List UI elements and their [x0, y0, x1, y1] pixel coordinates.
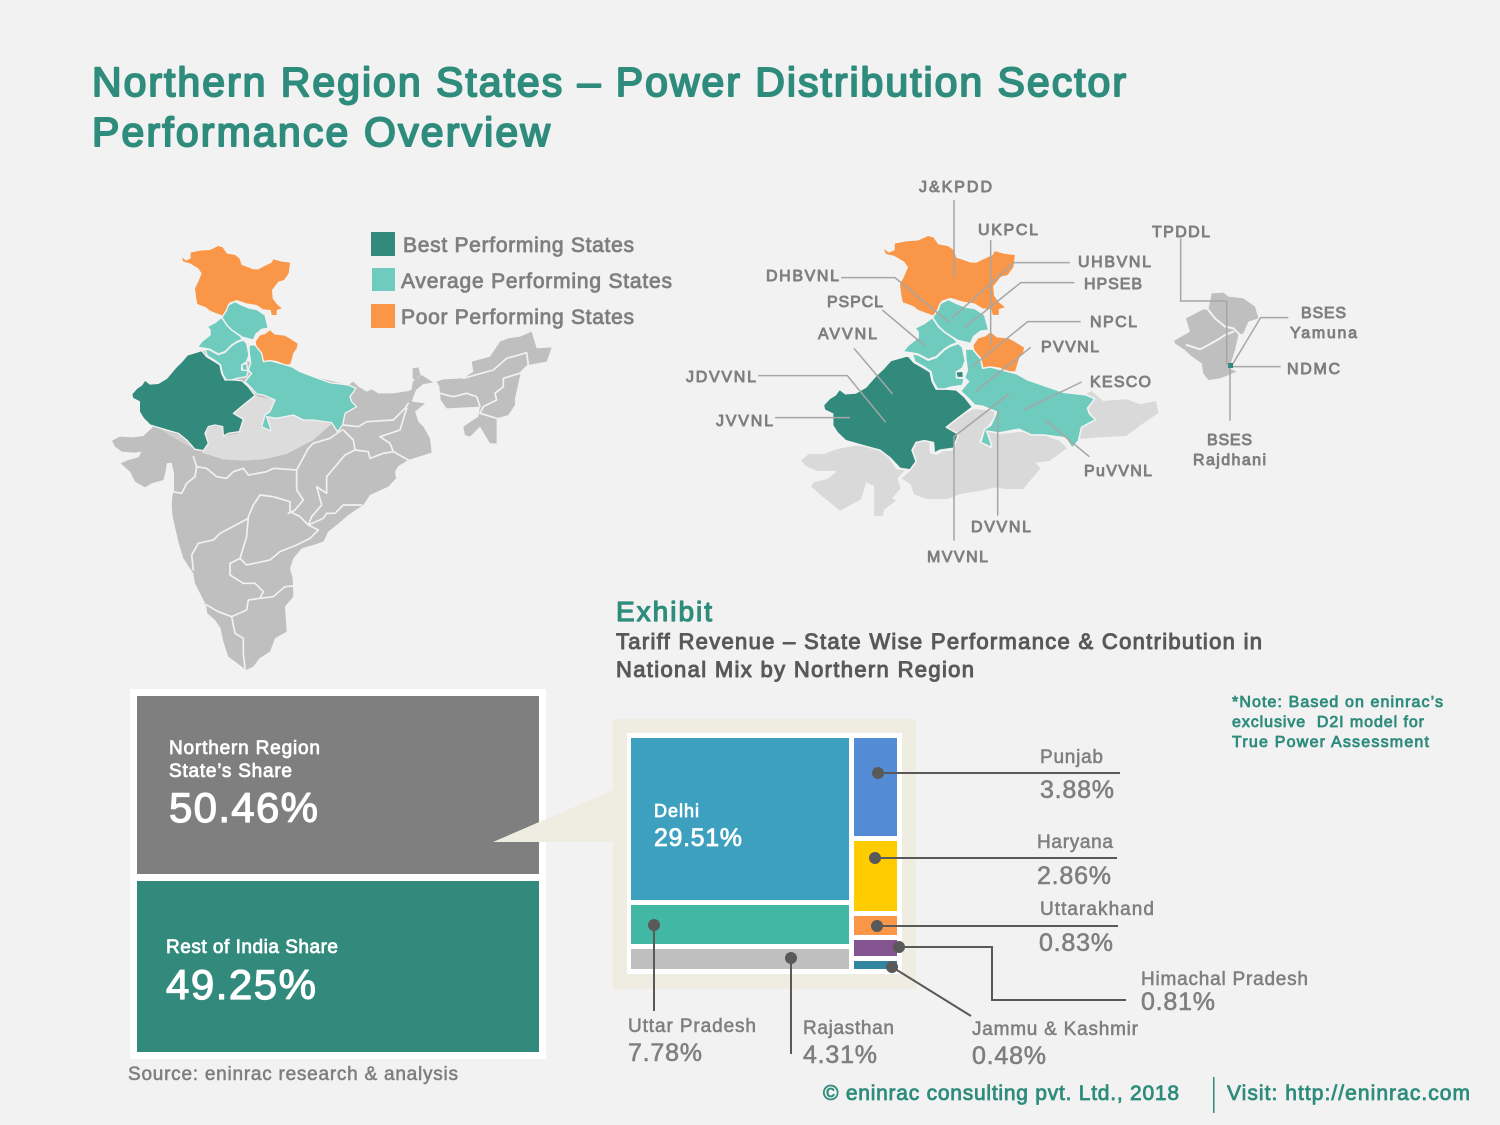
label: Rajasthan: 4.31% [803, 1041, 877, 1069]
treemap leader lines and dots [648, 767, 1126, 1054]
discom labels: NPCL [1090, 314, 1137, 331]
leader lines: northern map [758, 200, 1089, 541]
label: Haryana: Haryana [1037, 832, 1113, 853]
footer [823, 1077, 1470, 1113]
legend: average: Average Performing States [401, 270, 672, 293]
rest of India share text: 49.25% [166, 961, 316, 1008]
note: exclusive D2I model for [1232, 714, 1425, 731]
note [1232, 694, 1443, 751]
callout pointer and treemap frame [493, 719, 916, 989]
title [92, 59, 1126, 155]
legend [371, 232, 672, 329]
Delhi: 29.51% [654, 824, 742, 852]
discom labels: Yamuna [1290, 325, 1357, 342]
label: Himachal Pradesh: 0.81% [1141, 988, 1215, 1016]
label: Jammu & Kashmir: Jammu & Kashmir [972, 1019, 1139, 1040]
discom labels: NDMC [1287, 361, 1340, 378]
label: Uttarakhand [1039, 899, 1154, 957]
label: Punjab: Punjab [1040, 747, 1103, 768]
exhibit subheading: Tariff Revenue – State Wise Performance & Contribution in [616, 629, 1262, 654]
discom labels: UKPCL [978, 222, 1038, 239]
title: Performance Overview [92, 109, 550, 155]
icon: New Delhi marker [1228, 363, 1233, 368]
label: Uttar Pradesh: 7.78% [628, 1039, 702, 1067]
discom labels: Rajdhani [1193, 452, 1266, 469]
discom labels: DVVNL [971, 519, 1031, 536]
legend: best: Best Performing States [403, 234, 634, 257]
discom labels: PVVNL [1041, 339, 1099, 356]
label: Uttarakhand: Uttarakhand [1040, 899, 1154, 920]
Delhi [631, 738, 849, 900]
discom labels: HPSEB [1084, 276, 1142, 293]
exhibit subheading: National Mix by Northern Region [616, 657, 974, 682]
exhibit heading: Exhibit [616, 596, 712, 627]
label: Punjab [1040, 747, 1114, 804]
discom labels: TPDDL [1152, 224, 1210, 241]
label: Punjab: 3.88% [1040, 776, 1114, 804]
note: True Power Assessment [1232, 734, 1430, 751]
rest of India share text: Rest of India Share [166, 937, 338, 958]
leader lines: Delhi [1181, 238, 1288, 421]
legend: poor: Poor Performing States [401, 306, 634, 329]
map: Delhi inset [1174, 293, 1258, 380]
treemap [627, 733, 902, 974]
map: northern region distribution companies [800, 236, 1159, 517]
label: Haryana: 2.86% [1037, 862, 1111, 890]
discom labels: PuVVNL [1084, 463, 1152, 480]
label: Himachal Pradesh: Himachal Pradesh [1141, 969, 1308, 990]
label: Uttarakhand: 0.83% [1039, 929, 1113, 957]
note: *Note: Based on eninrac’s [1232, 694, 1443, 711]
discom labels: JDVVNL [686, 369, 756, 386]
label: Haryana [1037, 832, 1113, 890]
label: Jammu & Kashmir [972, 1019, 1139, 1070]
map: India performance [112, 246, 552, 670]
discom labels: DHBVNL [766, 268, 839, 285]
title: Northern Region States – Power Distribution Sector [92, 59, 1126, 105]
northern region share text: State’s Share [169, 761, 292, 782]
northern region share text: Northern Region [169, 738, 320, 759]
discom labels: BSES [1207, 432, 1252, 449]
discom labels: JVVNL [716, 413, 773, 430]
discom labels: UHBVNL [1078, 254, 1151, 271]
exhibit subheading [616, 629, 1262, 682]
rest of India share text [166, 937, 338, 1008]
discom labels: MVVNL [927, 549, 988, 566]
discom labels: KESCO [1090, 374, 1151, 391]
label: Himachal Pradesh [1141, 969, 1308, 1016]
northern region share text: 50.46% [169, 784, 318, 831]
discom labels: BSES [1301, 305, 1346, 322]
Delhi: Delhi [654, 801, 699, 821]
label: Uttar Pradesh [628, 1016, 756, 1067]
discom labels: AVVNL [818, 326, 877, 343]
label: Jammu & Kashmir: 0.48% [972, 1042, 1046, 1070]
discom labels [686, 179, 1357, 566]
label: Rajasthan [803, 1018, 894, 1069]
discom labels: J&KPDD [919, 179, 992, 196]
discom labels: PSPCL [827, 294, 883, 311]
northern region share text [169, 738, 320, 831]
footer: Visit: http://eninrac.com [1227, 1082, 1470, 1105]
source: Source: eninrac research & analysis [128, 1064, 458, 1085]
footer: © eninrac consulting pvt. Ltd., 2018 [823, 1082, 1179, 1105]
panel: India share split [130, 689, 546, 1059]
label: Uttar Pradesh: Uttar Pradesh [628, 1016, 756, 1037]
label: Rajasthan: Rajasthan [803, 1018, 894, 1039]
